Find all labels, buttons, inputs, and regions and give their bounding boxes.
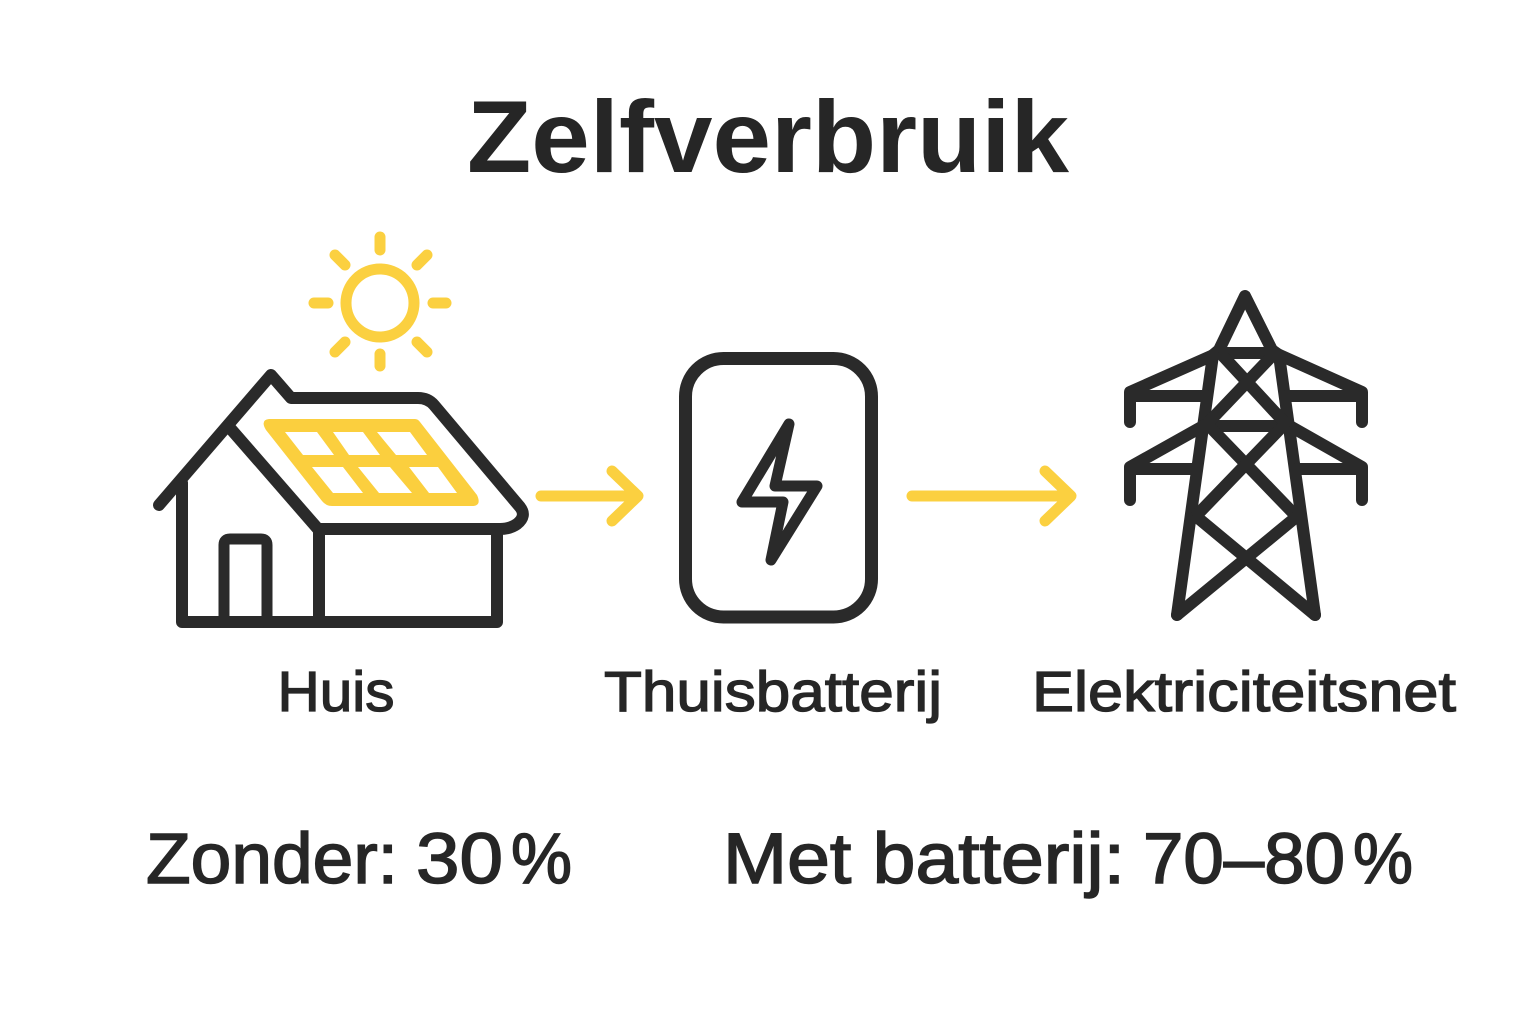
stat: without battery: %: [511, 820, 572, 899]
title: Zelfverbruik: [467, 80, 1069, 194]
arrow: battery to grid: [912, 471, 1071, 521]
icon: home battery: [686, 358, 872, 617]
stat: without battery: 30: [416, 820, 503, 899]
stat: with battery: 70–80: [1143, 820, 1345, 899]
icon: house with solar panels: [159, 375, 523, 622]
stat: with battery: Met batterij:: [723, 820, 1125, 899]
icon: lightning bolt: [742, 424, 817, 560]
solar panels: [264, 419, 479, 506]
icon: electricity pylon: [1130, 296, 1362, 615]
label: Elektriciteitsnet: Elektriciteitsnet: [1032, 660, 1456, 724]
label: Thuisbatterij: Thuisbatterij: [604, 660, 942, 724]
stat: without battery: [146, 820, 572, 899]
stat: without battery: Zonder:: [146, 820, 398, 899]
stat: with battery: [723, 820, 1413, 899]
stat: with battery: %: [1353, 820, 1413, 899]
icon: sun: [314, 237, 446, 366]
label: Huis: Huis: [278, 660, 394, 724]
arrow: house to battery: [541, 471, 638, 521]
